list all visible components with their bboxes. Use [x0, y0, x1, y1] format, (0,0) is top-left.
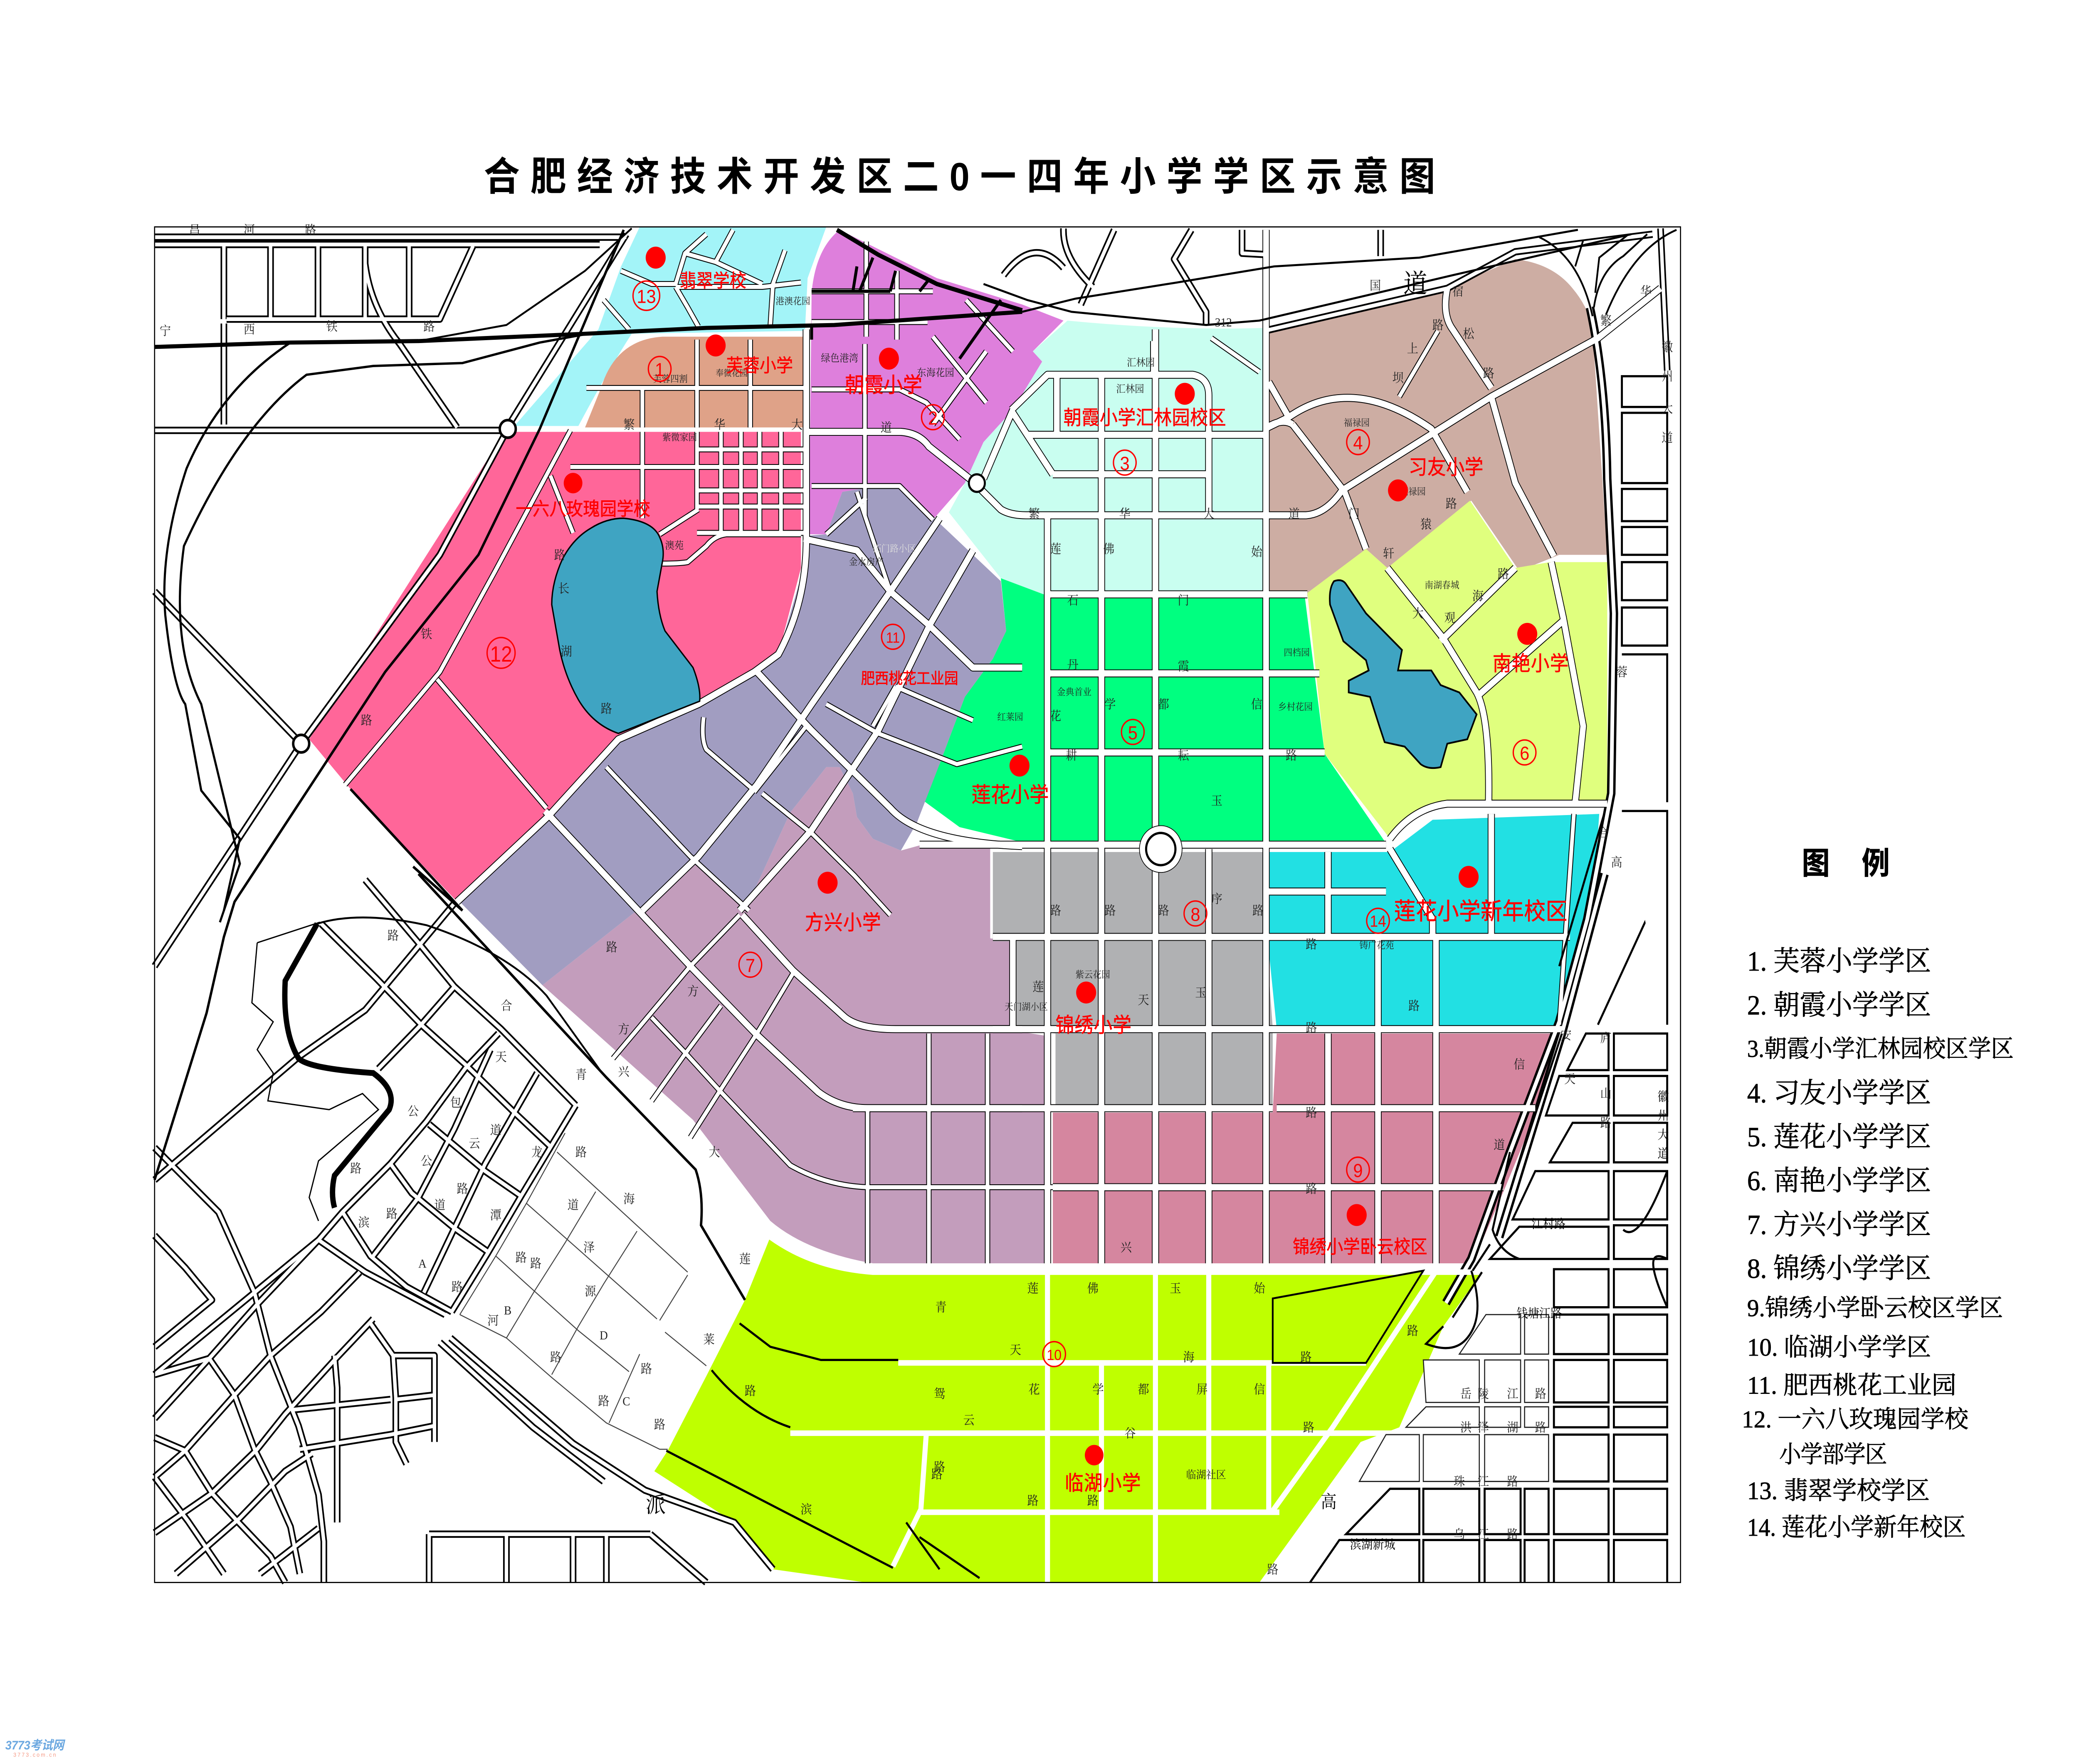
small road and estate labels: 霞	[1178, 660, 1189, 674]
small road and estate labels: 青	[575, 1068, 587, 1082]
small road and estate labels: 信	[1514, 1058, 1525, 1072]
marker 2: 2	[928, 408, 938, 429]
interchange	[1426, 1152, 1667, 1348]
marker 8	[1184, 901, 1207, 926]
small road and estate labels: 方	[687, 985, 699, 998]
small road and estate labels: 耕	[1066, 749, 1077, 763]
school name labels: 肥西桃花工业园	[861, 670, 958, 687]
small road and estate labels: 铁	[326, 320, 338, 334]
small road and estate labels: 云	[469, 1137, 480, 1151]
small road and estate labels: 合	[501, 999, 512, 1013]
small road and estate labels: 紫云花园	[1076, 970, 1110, 980]
small road and estate labels: 高	[1611, 856, 1622, 870]
zone 11: 肥西桃花工业园	[460, 483, 1006, 985]
zone 2: 朝霞小学	[809, 230, 1064, 534]
small road and estate labels: 路	[1600, 1117, 1612, 1130]
small road and estate labels: 海	[1472, 589, 1484, 603]
small road and estate labels: 佛	[1087, 1282, 1099, 1296]
numbered zone markers	[487, 281, 1536, 1366]
small road and estate labels: 兴	[618, 1065, 630, 1079]
small road and estate labels: 湖	[561, 645, 572, 659]
school name labels: 锦绣小学	[1055, 1013, 1131, 1036]
small road and estate labels: 天	[1010, 1344, 1021, 1357]
small road and estate labels: 路	[554, 548, 565, 562]
small road and estate labels: 路	[1087, 1494, 1099, 1508]
small road and estate labels: 东海花园	[917, 367, 954, 379]
small road and estate labels: 大	[791, 418, 802, 432]
small road and estate labels: 拓门路小区	[873, 544, 916, 554]
small road and estate labels: 佛	[1103, 543, 1114, 556]
lake in zone 6	[1330, 580, 1477, 768]
small road and estate labels: 芙蓉四割	[653, 374, 688, 384]
small road and estate labels: 大	[1657, 1128, 1669, 1142]
roundabout: north	[969, 474, 985, 492]
small road and estate labels: 河	[244, 224, 255, 237]
zone 1: 芙蓉小学	[585, 337, 805, 427]
small road and estate labels: 西	[244, 324, 255, 337]
small road and estate labels: 南湖春城	[1425, 580, 1459, 590]
small road and estate labels: 路	[1306, 1182, 1317, 1196]
small road and estate labels: 四档园	[1284, 647, 1310, 658]
small road and estate labels: 高	[1321, 1492, 1337, 1512]
small road and estate labels: 源	[585, 1285, 597, 1299]
marker 13: 13	[637, 286, 656, 307]
zone 3: 朝霞小学汇林园校区	[949, 321, 1266, 596]
watermark: 3773考试网	[5, 1739, 66, 1752]
small road and estate labels: 繁	[623, 418, 635, 432]
small road and estate labels: 公	[421, 1155, 432, 1169]
small road and estate labels: 临湖社区	[1186, 1469, 1226, 1481]
watermark	[5, 1739, 66, 1758]
marker 6: 6	[1520, 743, 1529, 764]
small road and estate labels: 繁	[1600, 314, 1612, 328]
small road and estate labels: 路	[1050, 904, 1061, 918]
legend entries: 5. 莲花小学学区	[1747, 1122, 1931, 1152]
school name labels: 习友小学	[1409, 456, 1483, 479]
small road and estate labels: C	[622, 1395, 630, 1408]
marker 9	[1347, 1157, 1369, 1182]
marker 4	[1347, 430, 1369, 455]
small road and estate labels: 滨	[358, 1216, 370, 1230]
marker 5	[1121, 719, 1144, 744]
small road and estate labels: 州	[1657, 1109, 1669, 1123]
small road and estate labels: 路	[386, 1207, 398, 1221]
small road and estate labels: 莱	[704, 1333, 715, 1347]
marker 10	[1043, 1342, 1065, 1366]
legend entries: 14. 莲花小学新年校区	[1747, 1514, 1966, 1541]
small road and estate labels: 路	[1306, 938, 1317, 951]
marker 11	[881, 624, 904, 649]
small road and estate labels: 州	[1662, 370, 1673, 384]
small road and estate labels: 乡村花园	[1278, 702, 1313, 712]
small road and estate labels: 山	[1600, 1087, 1612, 1101]
small road and estate labels: 路	[931, 1468, 943, 1482]
marker 12	[487, 637, 515, 668]
small road and estate labels: 奉微花园	[716, 368, 748, 378]
small road and estate labels: 陵	[1478, 1387, 1489, 1401]
railways	[155, 228, 1677, 1317]
small road and estate labels: 乌	[1454, 1528, 1465, 1542]
small road and estate labels: 兴	[1121, 1241, 1132, 1255]
small road and estate labels: 华	[1119, 507, 1131, 521]
small road and estate labels: 汇林园	[1127, 357, 1155, 368]
small road and estate labels: 路	[550, 1351, 561, 1364]
small road and estate labels: 路	[1252, 904, 1264, 918]
small road and estate labels: 观	[1444, 612, 1456, 625]
small road and estate labels: 学	[1104, 698, 1116, 712]
river bank	[252, 922, 378, 1221]
small road and estate labels: 徽	[1657, 1090, 1669, 1104]
zone 9: 锦绣小学卧云校区	[1053, 1033, 1562, 1263]
small road and estate labels: 路	[654, 1418, 665, 1432]
small road and estate labels: 莲	[1050, 543, 1061, 556]
small road and estate labels: 金水房产	[849, 557, 884, 567]
marker 6	[1513, 740, 1536, 765]
small road and estate labels: 路	[1483, 367, 1494, 381]
small road and estate labels: 江	[1507, 1388, 1519, 1401]
small road and estate labels: 绿色港湾	[821, 353, 858, 364]
small road and estate labels: 国	[1370, 279, 1381, 293]
school name labels: 方兴小学	[805, 911, 881, 934]
small road and estate labels: 大	[1412, 607, 1424, 621]
school name labels: 临湖小学	[1065, 1472, 1141, 1495]
legend entries	[1742, 946, 2014, 1541]
legend entries: 8. 锦绣小学学区	[1747, 1253, 1931, 1284]
small road and estate labels: 路	[1267, 1563, 1279, 1577]
small road and estate labels: 路	[1407, 1324, 1418, 1338]
small road and estate labels: 洪	[1460, 1421, 1472, 1435]
title: 合肥经济技术开发区二0一四年小学学区示意图	[484, 155, 1435, 199]
small road and estate labels: 路	[1306, 1106, 1317, 1120]
small road and estate labels: 都	[1158, 698, 1169, 712]
marker 3	[1114, 450, 1136, 475]
small road and estate labels: 道	[434, 1198, 445, 1212]
small road and estate labels: 路	[1306, 1021, 1317, 1035]
legend entries: 3.朝霞小学汇林园校区学区	[1747, 1036, 2014, 1062]
small road and estate labels: 路	[452, 1280, 463, 1294]
small road and estate labels: 道	[881, 421, 892, 435]
small road and estate labels: 路	[1498, 567, 1509, 581]
school name labels: 翡翠学校	[680, 270, 746, 291]
small road and estate labels: 潭	[490, 1208, 501, 1223]
marker 12: 12	[490, 642, 512, 667]
small road and estate labels: 路	[575, 1146, 587, 1159]
marker 1: 1	[655, 359, 664, 380]
small road and estate labels: 华	[714, 418, 725, 432]
small road and estate labels: 路	[1446, 497, 1457, 511]
small road and estate labels: 花	[1029, 1383, 1040, 1397]
small road and estate labels: 玉	[1170, 1282, 1181, 1296]
small road and estate labels: 路	[1303, 1421, 1314, 1435]
small road and estate labels: 天	[496, 1051, 507, 1065]
small road and estate labels: 路	[1027, 1494, 1039, 1508]
road network, carriageways	[155, 228, 1667, 1582]
school name labels: 莲花小学新年校区	[1394, 898, 1567, 924]
small road and estate labels: 312	[1215, 316, 1232, 329]
small road and estate labels: 合	[1598, 826, 1609, 840]
small road and estate labels: 江村路	[1532, 1217, 1565, 1231]
school name labels: 朝霞小学汇林园校区	[1064, 407, 1226, 429]
small road and estate labels: 路	[1158, 904, 1169, 918]
small road and estate labels: 大	[709, 1146, 720, 1159]
small road and estate labels: 大	[1203, 507, 1215, 521]
small road and estate labels: 宁	[160, 324, 171, 338]
small road and estate labels: 道	[1403, 270, 1427, 299]
marker 10: 10	[1047, 1347, 1062, 1364]
school name labels: 芙蓉小学	[726, 355, 793, 376]
small road and estate labels: 道	[1662, 431, 1673, 445]
small road and estate labels: 路	[530, 1257, 541, 1271]
zone 10 uncased roads	[770, 1237, 1482, 1582]
school name labels: 南艳小学	[1493, 652, 1568, 675]
small road and estate labels: 紫微家园	[662, 432, 697, 443]
marker 14: 14	[1370, 912, 1386, 930]
small road and estate labels: 路	[1408, 999, 1420, 1013]
legend entries: 9.锦绣小学卧云校区学区	[1747, 1295, 2003, 1322]
east city blocks	[1310, 376, 1667, 1582]
small road and estate labels: 徽	[1662, 341, 1673, 354]
small road and estate labels: 上	[1407, 342, 1418, 356]
small road and estate labels: 红莱园	[997, 712, 1023, 722]
marker 7	[739, 952, 762, 977]
small road and estate labels: 青	[935, 1301, 946, 1315]
marker 5: 5	[1128, 722, 1138, 744]
small road and estate labels: 路	[1286, 749, 1297, 763]
small road and estate labels: 始	[1251, 546, 1263, 559]
school name labels: 莲花小学	[972, 783, 1049, 807]
small road and estate labels: 宿	[1452, 285, 1464, 299]
small road and estate labels: 花	[1050, 709, 1061, 723]
small road and estate labels: 繁	[1029, 507, 1040, 521]
small road and estate labels: 路	[1535, 1421, 1546, 1435]
zone 10 framed block	[1273, 1271, 1423, 1363]
small road and estate labels: 泽	[583, 1241, 595, 1255]
legend entries: 2. 朝霞小学学区	[1747, 990, 1931, 1020]
map background	[155, 227, 1681, 1582]
small road and estate labels: 金典首业	[1057, 687, 1091, 697]
small road and estate labels: 铸广花苑	[1359, 940, 1394, 951]
small road and estate labels: 路	[1432, 319, 1444, 332]
legend entries: 小学部学区	[1779, 1442, 1887, 1468]
roundabout: north-west	[500, 420, 516, 438]
small road and estate labels: 道	[1494, 1138, 1505, 1152]
small road and estate labels: 路	[361, 714, 372, 728]
small road and estate labels: 路	[1507, 1528, 1518, 1542]
small road and estate labels: 泽	[1478, 1421, 1489, 1435]
marker 7: 7	[746, 955, 755, 976]
small road and estate labels: 海	[1183, 1351, 1195, 1364]
small road and estate labels: 天门湖小区	[1005, 1002, 1048, 1012]
zone 14: 莲花小学新年校区	[1266, 814, 1599, 1029]
small road and estate labels: 信	[1251, 698, 1262, 712]
zone 8: 锦绣小学	[993, 852, 1273, 1108]
small road and estate labels: 昌	[189, 224, 200, 237]
marker 9: 9	[1353, 1160, 1363, 1181]
small road and estate labels: 道	[568, 1198, 579, 1212]
lake in zone 12	[552, 518, 700, 734]
small road and estate labels: 鸳	[934, 1387, 945, 1401]
small road and estate labels: 江	[1478, 1528, 1489, 1542]
small road and estate labels: 玉	[1195, 986, 1206, 1000]
zone 13: 翡翠学校	[514, 227, 826, 426]
small road and estate labels: 路	[1300, 1351, 1312, 1364]
lower black road edges	[667, 1323, 980, 1578]
legend entries: 1. 芙蓉小学学区	[1747, 946, 1931, 977]
small road and estate labels: 庐	[1600, 1031, 1612, 1045]
small road and estate labels: 路	[641, 1362, 652, 1376]
school name labels: 朝霞小学	[845, 373, 922, 397]
marker 4: 4	[1353, 432, 1363, 454]
small road and estate labels: 龙	[531, 1146, 543, 1159]
small road and estate labels: 方	[618, 1023, 630, 1037]
marker 11: 11	[886, 630, 900, 646]
small road and estate labels: 学	[1092, 1383, 1104, 1397]
small road and estate labels: B	[504, 1304, 511, 1318]
small road and estate labels: 福禄园	[1344, 418, 1370, 428]
watermark: 3773.com.cn	[13, 1752, 56, 1758]
legend entries: 13. 翡翠学校学区	[1747, 1477, 1930, 1505]
small road and estate labels: 屏	[1196, 1383, 1208, 1397]
legend entries: 10. 临湖小学学区	[1747, 1334, 1931, 1361]
roundabout: central	[1139, 825, 1182, 872]
school name labels: 一六八玫瑰园学校	[516, 499, 650, 519]
legend entries: 7. 方兴小学学区	[1747, 1209, 1931, 1240]
small road and estate labels: 派	[646, 1492, 666, 1517]
small road and estate labels: 玉	[1211, 795, 1222, 808]
small road and estate labels: D	[600, 1329, 608, 1342]
marker 8: 8	[1190, 904, 1200, 925]
small road and estate labels: 路	[598, 1394, 610, 1408]
small road and estate labels: 序	[1211, 892, 1222, 906]
small road and estate labels: 道	[1657, 1147, 1669, 1161]
small road and estate labels: 滨	[800, 1503, 812, 1517]
small road and estate labels: 安	[1560, 1028, 1572, 1043]
zone 6: 南艳小学	[1307, 501, 1607, 839]
zone 7: 方兴小学	[542, 767, 1050, 1263]
small road and estate labels: 坝	[1393, 371, 1404, 385]
small road and estate labels: 石	[1067, 594, 1079, 608]
small road and estate labels: 丹	[1067, 659, 1079, 672]
small road and estate labels: 门	[1178, 594, 1189, 608]
small road and estate labels: 路	[934, 1460, 945, 1474]
small road and estate labels: 蓉	[1616, 665, 1627, 679]
small road and estate labels: 始	[1254, 1282, 1266, 1296]
marker 3: 3	[1120, 453, 1130, 474]
map frame	[155, 227, 1681, 1582]
small road and estate labels: 澳苑	[665, 540, 684, 551]
small road and estate labels: 路	[388, 929, 399, 943]
small road and estate labels: 河	[487, 1314, 499, 1328]
small road and estate labels: 莲	[1027, 1282, 1039, 1296]
zone 12: 一六八玫瑰园学校	[309, 432, 801, 902]
marker 14	[1367, 908, 1389, 933]
small road and estate labels: 云	[963, 1414, 975, 1428]
small road and estate labels: 海	[623, 1193, 635, 1206]
thin road grid	[460, 1133, 706, 1449]
small road and estate labels: 路	[601, 702, 612, 716]
small road and estate labels: 路	[745, 1384, 756, 1398]
legend entries: 12. 一六八玫瑰园学校	[1742, 1406, 1969, 1433]
small road and estate labels: 门	[1348, 507, 1360, 521]
small road and estate labels: 都	[1138, 1383, 1149, 1397]
small road and estate labels: 路	[457, 1182, 468, 1196]
small road and estate labels: 路	[606, 941, 617, 955]
legend entries: 4. 习友小学学区	[1747, 1077, 1931, 1108]
small road and estate labels: 路	[305, 223, 316, 237]
small road and estate labels: 路	[350, 1162, 361, 1176]
small road and estate labels: 路	[516, 1251, 527, 1265]
small road and estate labels: 信	[1254, 1383, 1265, 1397]
small road and estate labels: 天	[1138, 994, 1149, 1007]
small road and estate labels: 松	[1463, 327, 1474, 341]
legend entries: 6. 南艳小学学区	[1747, 1165, 1931, 1196]
small road and estate labels	[160, 223, 1673, 1577]
school name labels	[516, 270, 1568, 1495]
small road and estate labels: 钱塘江路	[1516, 1307, 1562, 1321]
zone 5: 莲花小学	[920, 578, 1386, 843]
marker 1	[648, 356, 671, 381]
marker 13	[633, 281, 660, 310]
small road and estate labels: 大	[1662, 402, 1673, 416]
small road and estate labels: 湖	[1507, 1421, 1518, 1435]
map panel	[155, 223, 1681, 1582]
small road and estate labels: 汇林园	[1116, 383, 1144, 395]
small road and estate labels: 耘	[1178, 749, 1190, 763]
east thin blocks	[1359, 1314, 1548, 1482]
legend	[1742, 846, 2014, 1541]
roundabout: west	[293, 735, 309, 752]
small road and estate labels: 轩	[1383, 547, 1394, 561]
small road and estate labels: 路	[1535, 1387, 1546, 1401]
small road and estate labels: 天	[1564, 1073, 1575, 1086]
small road and estate labels: 长	[558, 582, 569, 596]
small road and estate labels: 华	[1640, 285, 1652, 299]
small road and estate labels: A	[418, 1258, 427, 1271]
small road and estate labels: 猿	[1420, 518, 1432, 531]
small road and estate labels: 岳	[1460, 1387, 1472, 1401]
river	[285, 924, 391, 1208]
school location dots	[564, 247, 1537, 1465]
small road and estate labels: 公	[407, 1105, 419, 1119]
zone 4: 习友小学	[1265, 259, 1607, 596]
small road and estate labels: 路	[1104, 904, 1116, 918]
small road and estate labels: 莲	[739, 1253, 751, 1266]
small road and estate labels: 江	[1478, 1475, 1489, 1489]
small road and estate labels: 道	[490, 1124, 501, 1138]
small road and estate labels: 路	[423, 320, 435, 334]
small road and estate labels: 港澳花园	[775, 296, 810, 306]
road network, casing	[155, 228, 1667, 1582]
legend entries: 11. 肥西桃花工业园	[1747, 1372, 1956, 1399]
small road and estate labels: 滨湖新城	[1350, 1538, 1395, 1552]
small road and estate labels: 谷	[1124, 1427, 1136, 1440]
zone 10: 临湖小学	[654, 1237, 1482, 1582]
legend title: 图 例	[1802, 846, 1890, 880]
small road and estate labels: 包	[450, 1096, 462, 1110]
small road and estate labels: 福禄园	[1400, 487, 1426, 497]
small road and estate labels: 道	[1289, 507, 1300, 521]
small road and estate labels: 珠	[1454, 1475, 1465, 1489]
small road and estate labels: 铁	[421, 628, 432, 641]
small road and estate labels: 莲	[1032, 980, 1044, 994]
marker 2	[921, 405, 944, 430]
school name labels: 锦绣小学卧云校区	[1293, 1237, 1427, 1257]
small road and estate labels: 路	[1507, 1475, 1518, 1489]
